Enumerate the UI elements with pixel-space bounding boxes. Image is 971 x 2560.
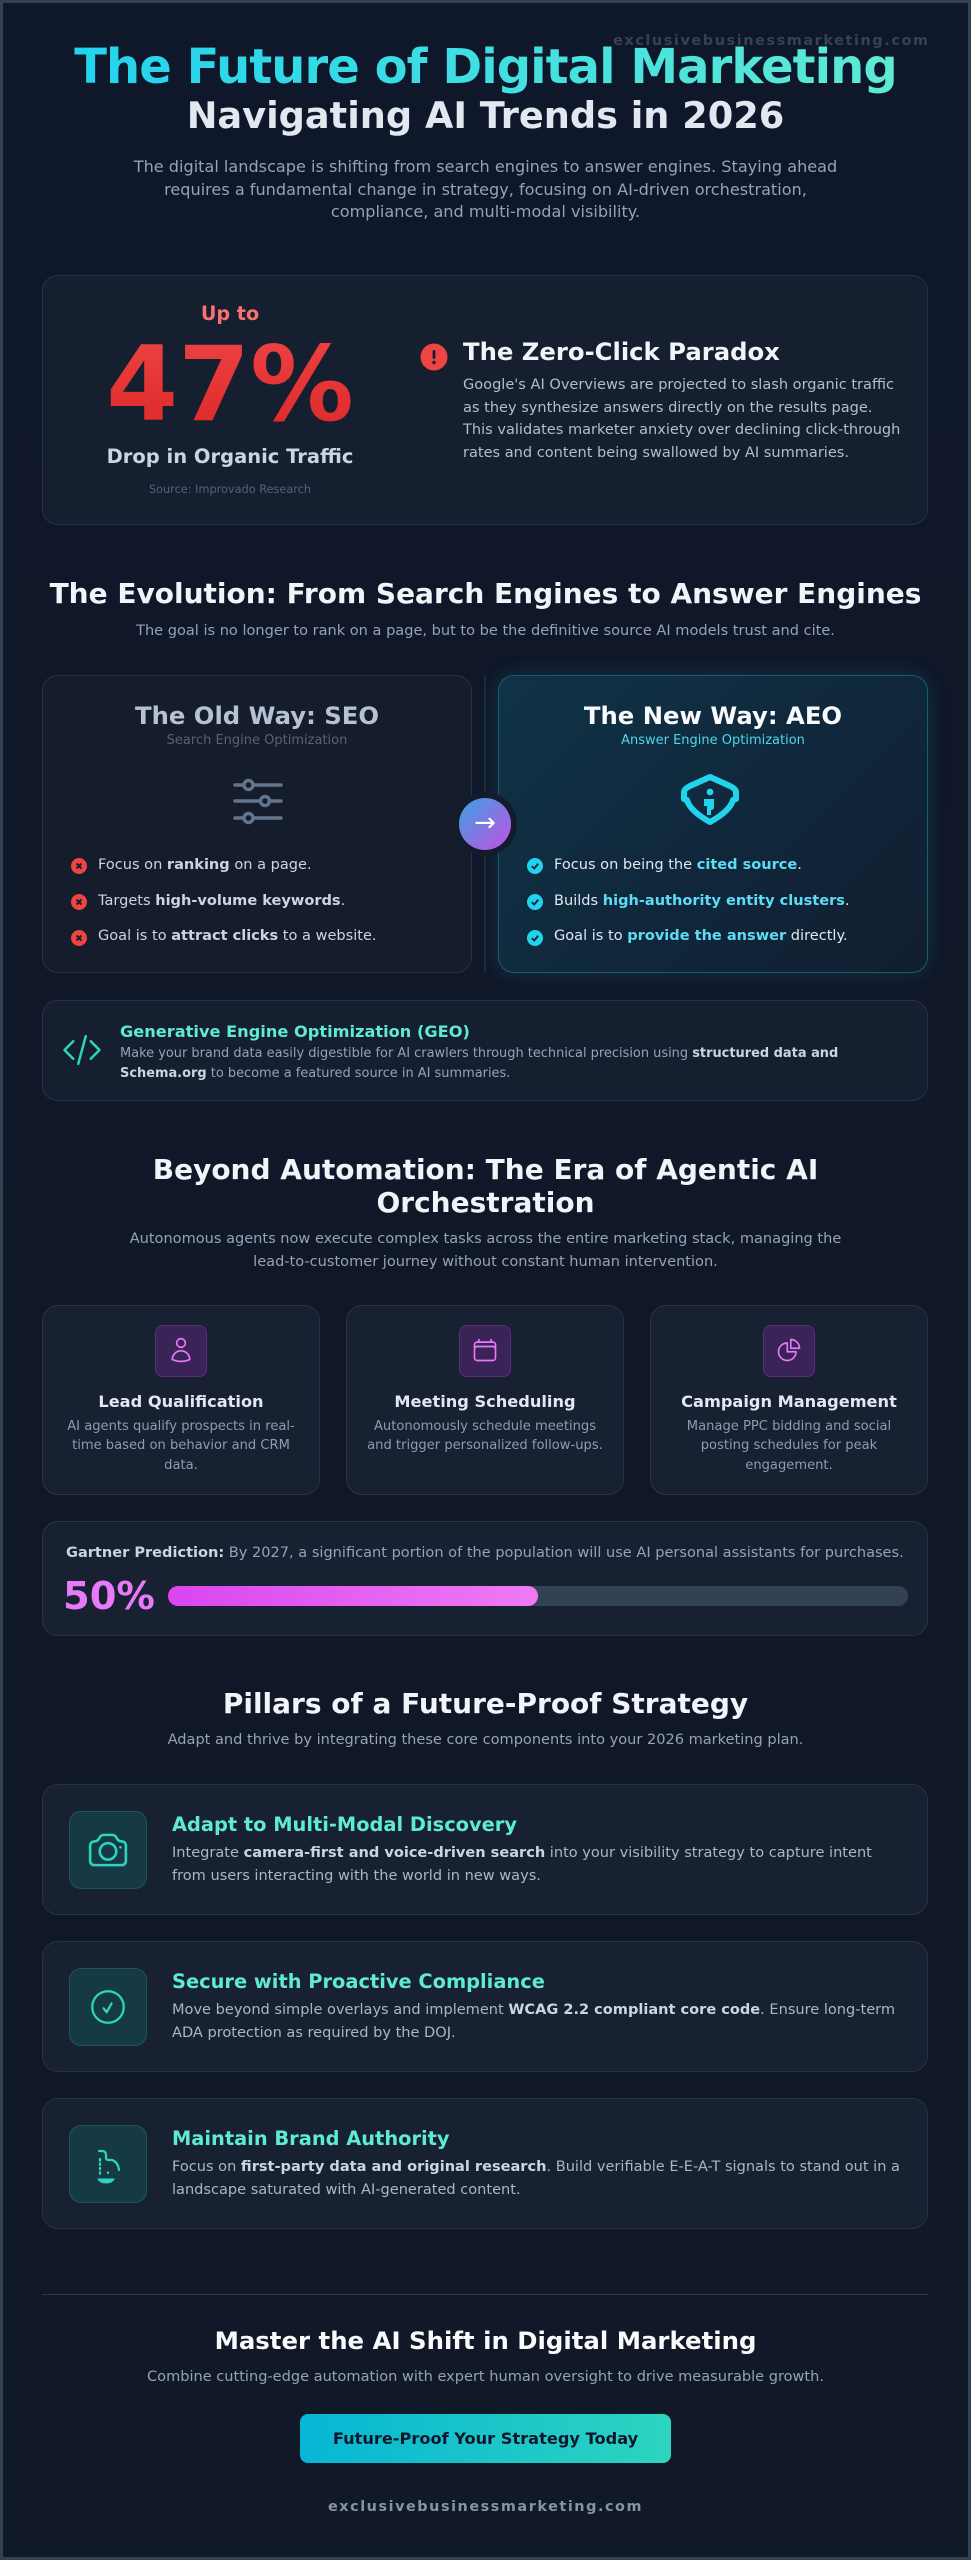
stat 50%: 50% (63, 1574, 155, 1619)
list item: Focus on ranking on a page. (98, 856, 312, 873)
heading: zero-click paradox: The Zero-Click Paradox (463, 337, 780, 366)
card text: Manage PPC bidding and social (687, 1419, 891, 1434)
stat label: Drop in Organic Traffic (107, 445, 353, 468)
panel subtitle: Search Engine Optimization (167, 733, 347, 748)
GEO text (120, 1046, 838, 1080)
progress bar (168, 1586, 908, 1606)
heading: evolution: The Evolution: From Search Engines to Answer Engines (50, 577, 921, 610)
list: old way (71, 856, 377, 946)
icon: cross (71, 894, 87, 910)
icon: cross (71, 858, 87, 874)
icon: pie chart (763, 1325, 815, 1377)
intro paragraph: compliance, and multi-modal visibility. (331, 202, 640, 221)
panel: campaign management (650, 1305, 928, 1495)
stat source: Source: Improvado Research (149, 483, 311, 496)
pillar text: Move beyond simple overlays and implement WCAG 2.2 compliant core code. Ensure long-term (172, 2001, 895, 2018)
pillar title: Maintain Brand Authority (172, 2127, 450, 2150)
footer URL: exclusivebusinessmarketing.com (328, 2499, 643, 2515)
heading: agentic AI (153, 1153, 818, 1219)
card text: and trigger personalized follow-ups. (367, 1438, 603, 1453)
card text (67, 1419, 295, 1473)
watermark: exclusivebusinessmarketing.com (613, 33, 930, 49)
card text: posting schedules for peak (701, 1438, 877, 1453)
intro paragraph: requires a fundamental change in strategy, focusing on AI-driven orchestration, (164, 180, 807, 199)
icon: code brackets (63, 1035, 101, 1065)
pillar text (172, 2158, 900, 2198)
card text: data. (164, 1458, 198, 1473)
panel: compliance (42, 1941, 928, 2072)
panel: old way SEO (42, 675, 472, 973)
list item: Goal is to attract clicks to a website. (98, 927, 377, 944)
GEO text: Make your brand data easily digestible for AI crawlers through technical precision using structured data and (120, 1046, 838, 1061)
panel: multi-modal (42, 1784, 928, 1915)
text: call to action: Combine cutting-edge automation with expert human oversight to drive measurable growth. (147, 2368, 824, 2385)
card text (367, 1419, 603, 1453)
paragraph: zero-click: This validates marketer anxiety over declining click-through (463, 421, 900, 438)
panel: new way AEO (498, 675, 928, 973)
pillar text (172, 1844, 872, 1884)
GEO text: Schema.org to become a featured source in AI summaries. (120, 1066, 510, 1080)
icon: calendar (459, 1325, 511, 1377)
list item: Builds high-authority entity clusters. (554, 892, 850, 909)
card text: Autonomously schedule meetings (374, 1419, 596, 1434)
list item: Focus on being the cited source. (554, 856, 802, 873)
panel title: The Old Way: SEO (135, 701, 379, 730)
subheading: agentic AI: Autonomous agents now execute complex tasks across the entire marketing stack, managing the (130, 1230, 841, 1247)
card title: Lead Qualification (98, 1392, 264, 1411)
title: The Future of Digital Marketing (74, 39, 897, 95)
icon: shield (681, 774, 739, 825)
heading: agentic AI: Beyond Automation: The Era of Agentic AI (153, 1153, 818, 1186)
progress fill (168, 1586, 538, 1606)
icon: sliders (233, 778, 283, 824)
big stat 47%: 47% (106, 325, 354, 445)
list item: Targets high-volume keywords. (98, 892, 345, 909)
icon: person (155, 1325, 207, 1377)
button: call to action: Future-Proof Your Strategy Today (333, 2429, 638, 2448)
heading: agentic AI: Orchestration (376, 1186, 595, 1219)
pillar title: Adapt to Multi-Modal Discovery (172, 1813, 517, 1836)
pillar text: from users interacting with the world in new ways. (172, 1867, 541, 1884)
icon: camera (69, 1811, 147, 1889)
paragraph: zero-click: rates and content being swallowed by AI summaries. (463, 444, 849, 461)
arrow badge: → (474, 808, 496, 838)
intro paragraph (134, 157, 837, 221)
pillar text: ADA protection as required by the DOJ. (172, 2024, 456, 2041)
list item: Goal is to provide the answer directly. (554, 927, 848, 944)
panel: Gartner prediction (42, 1521, 928, 1636)
paragraph: zero-click: as they synthesize answers directly on the results page. (463, 399, 872, 416)
icon: alert (420, 344, 448, 370)
paragraph: zero-click (462, 376, 900, 461)
icon: check (527, 930, 543, 946)
subheading: agentic AI (130, 1230, 841, 1270)
stat lead-in: Up to (201, 302, 259, 325)
list: new way (527, 856, 850, 946)
pillar text: Focus on first-party data and original research. Build verifiable E-E-A-T signals to stand out in a (172, 2158, 900, 2175)
card title: Campaign Management (681, 1392, 897, 1411)
button: call to action (300, 2414, 671, 2463)
subheading: pillars: Adapt and thrive by integrating these core components into your 2026 marketing plan. (168, 1731, 803, 1748)
paragraph: zero-click: Google's AI Overviews are projected to slash organic traffic (463, 376, 894, 393)
card text: AI agents qualify prospects in real- (67, 1419, 295, 1434)
icon: check (527, 894, 543, 910)
card text: time based on behavior and CRM (72, 1438, 290, 1453)
pillar text: landscape saturated with AI-generated content. (172, 2181, 521, 2198)
prediction text: Gartner Prediction: By 2027, a significant portion of the population will use AI personal assistants for purchases. (66, 1544, 904, 1561)
subheading: agentic AI: lead-to-customer journey without constant human intervention. (253, 1253, 718, 1270)
panel: lead qualification (42, 1305, 320, 1495)
pillar title: Secure with Proactive Compliance (172, 1970, 545, 1993)
icon: hand (69, 2125, 147, 2203)
heading: pillars: Pillars of a Future-Proof Strategy (223, 1687, 748, 1720)
card text: engagement. (745, 1458, 833, 1473)
panel: GEO (42, 1000, 928, 1101)
heading: call to action: Master the AI Shift in Digital Marketing (215, 2326, 756, 2355)
card title: Meeting Scheduling (394, 1392, 576, 1411)
center divider (484, 675, 486, 973)
icon: check (527, 858, 543, 874)
subtitle: Navigating AI Trends in 2026 (187, 94, 784, 137)
arrow badge (459, 798, 511, 850)
intro paragraph: The digital landscape is shifting from search engines to answer engines. Staying ahead (134, 157, 837, 176)
panel title: The New Way: AEO (584, 701, 842, 730)
panel: zero-click stat (42, 275, 928, 525)
subheading: evolution: The goal is no longer to rank on a page, but to be the definitive source AI models trust and cite. (136, 622, 835, 639)
GEO title: Generative Engine Optimization (GEO) (120, 1022, 470, 1041)
card text (687, 1419, 891, 1473)
panel: meeting scheduling (346, 1305, 624, 1495)
pillar text: Integrate camera-first and voice-driven search into your visibility strategy to capture intent (172, 1844, 872, 1861)
panel subtitle: Answer Engine Optimization (621, 733, 805, 748)
icon: cross (71, 930, 87, 946)
icon: check circle (69, 1968, 147, 2046)
pillar text (172, 2001, 895, 2041)
panel: brand authority (42, 2098, 928, 2229)
